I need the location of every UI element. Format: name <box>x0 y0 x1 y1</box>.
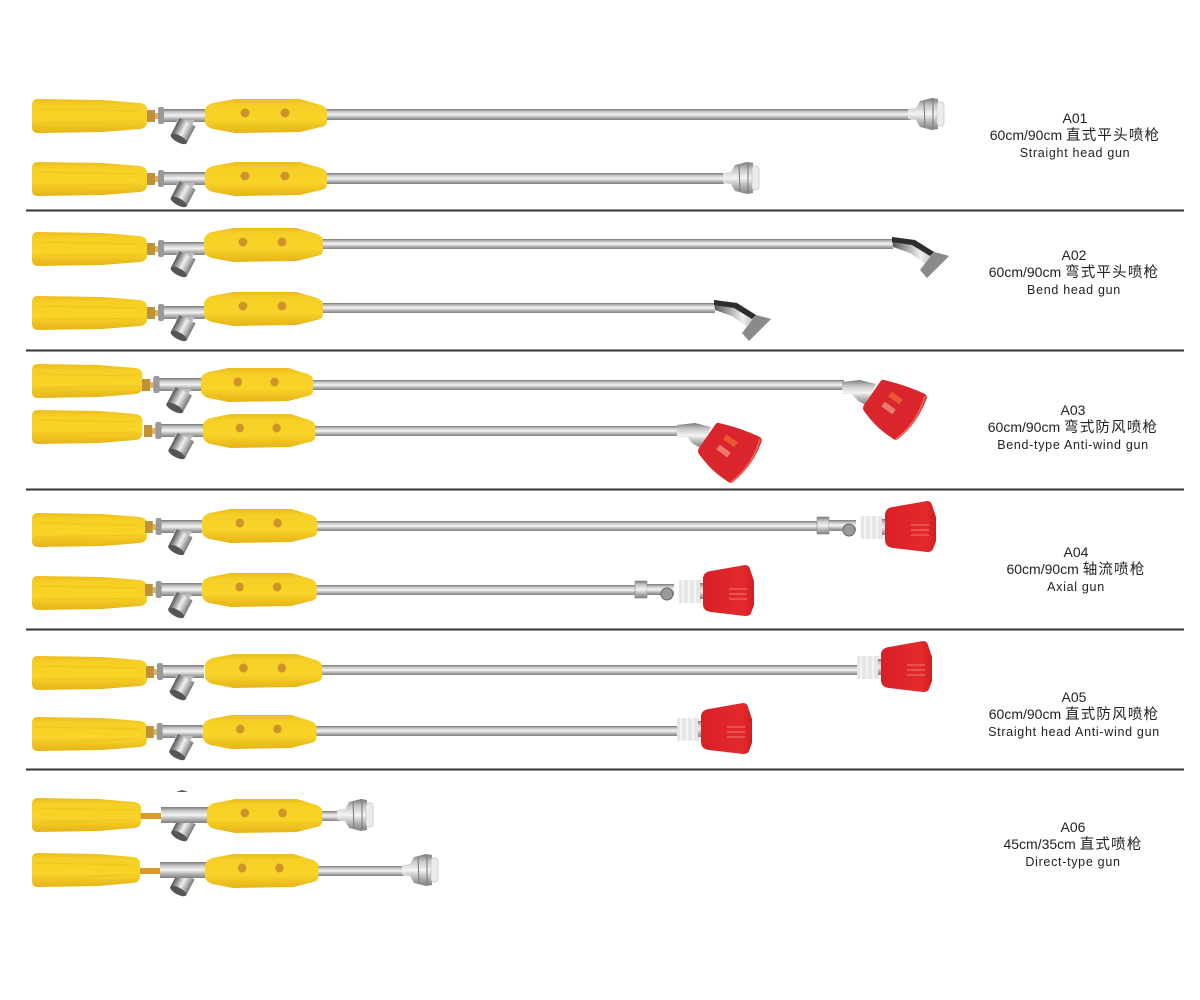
label: A04: 60cm/90cm 轴流喷枪 <box>1006 561 1146 578</box>
gun: A01 60cm <box>32 162 759 209</box>
label: A03: 60cm/90cm 弯式防风喷枪 <box>988 419 1158 436</box>
gun: A05 60cm <box>32 703 752 762</box>
label: A04: A04 <box>1064 544 1089 560</box>
gun: A04 90cm <box>32 501 936 557</box>
label: A06: Direct-type gun <box>1025 855 1121 869</box>
label: A06: A06 <box>1061 819 1086 835</box>
gun: A02 60cm <box>32 292 771 343</box>
label: A02: A02 <box>1062 247 1087 263</box>
gun: A03 90cm <box>32 364 927 440</box>
gun: A03 60cm <box>32 410 762 483</box>
section dividers <box>26 210 1184 770</box>
label: A03: Bend-type Anti-wind gun <box>997 438 1149 452</box>
panel: A05 straight head anti-wind gun <box>32 641 1160 762</box>
label: A02: Bend head gun <box>1027 283 1121 297</box>
label: A03: A03 <box>1061 402 1086 418</box>
gun: A04 60cm <box>32 565 754 620</box>
panel: A06 direct-type gun <box>32 790 1143 898</box>
panel: A01 straight head gun <box>32 98 1160 209</box>
label: A01: A01 <box>1063 110 1088 126</box>
label: A05: A05 <box>1062 689 1087 705</box>
label: A05: Straight head Anti-wind gun <box>988 725 1160 739</box>
label: A06: 45cm/35cm 直式喷枪 <box>1003 836 1143 853</box>
gun: A05 90cm <box>32 641 932 702</box>
label: A01: 60cm/90cm 直式平头喷枪 <box>990 127 1160 144</box>
panel: A02 bend head gun <box>32 228 1159 343</box>
gun: A02 90cm <box>32 228 949 279</box>
label: A01: Straight head gun <box>1020 146 1130 160</box>
label: A05: 60cm/90cm 直式防风喷枪 <box>989 706 1159 723</box>
panel: A04 axial gun <box>32 501 1146 620</box>
gun: A01 90cm <box>32 98 944 146</box>
gun: A06 45cm <box>32 790 373 843</box>
panel: A03 bend-type anti-wind gun <box>32 364 1158 483</box>
label: A04: Axial gun <box>1047 580 1105 594</box>
gun: A06 35cm <box>32 853 438 898</box>
label: A02: 60cm/90cm 弯式平头喷枪 <box>989 264 1159 281</box>
